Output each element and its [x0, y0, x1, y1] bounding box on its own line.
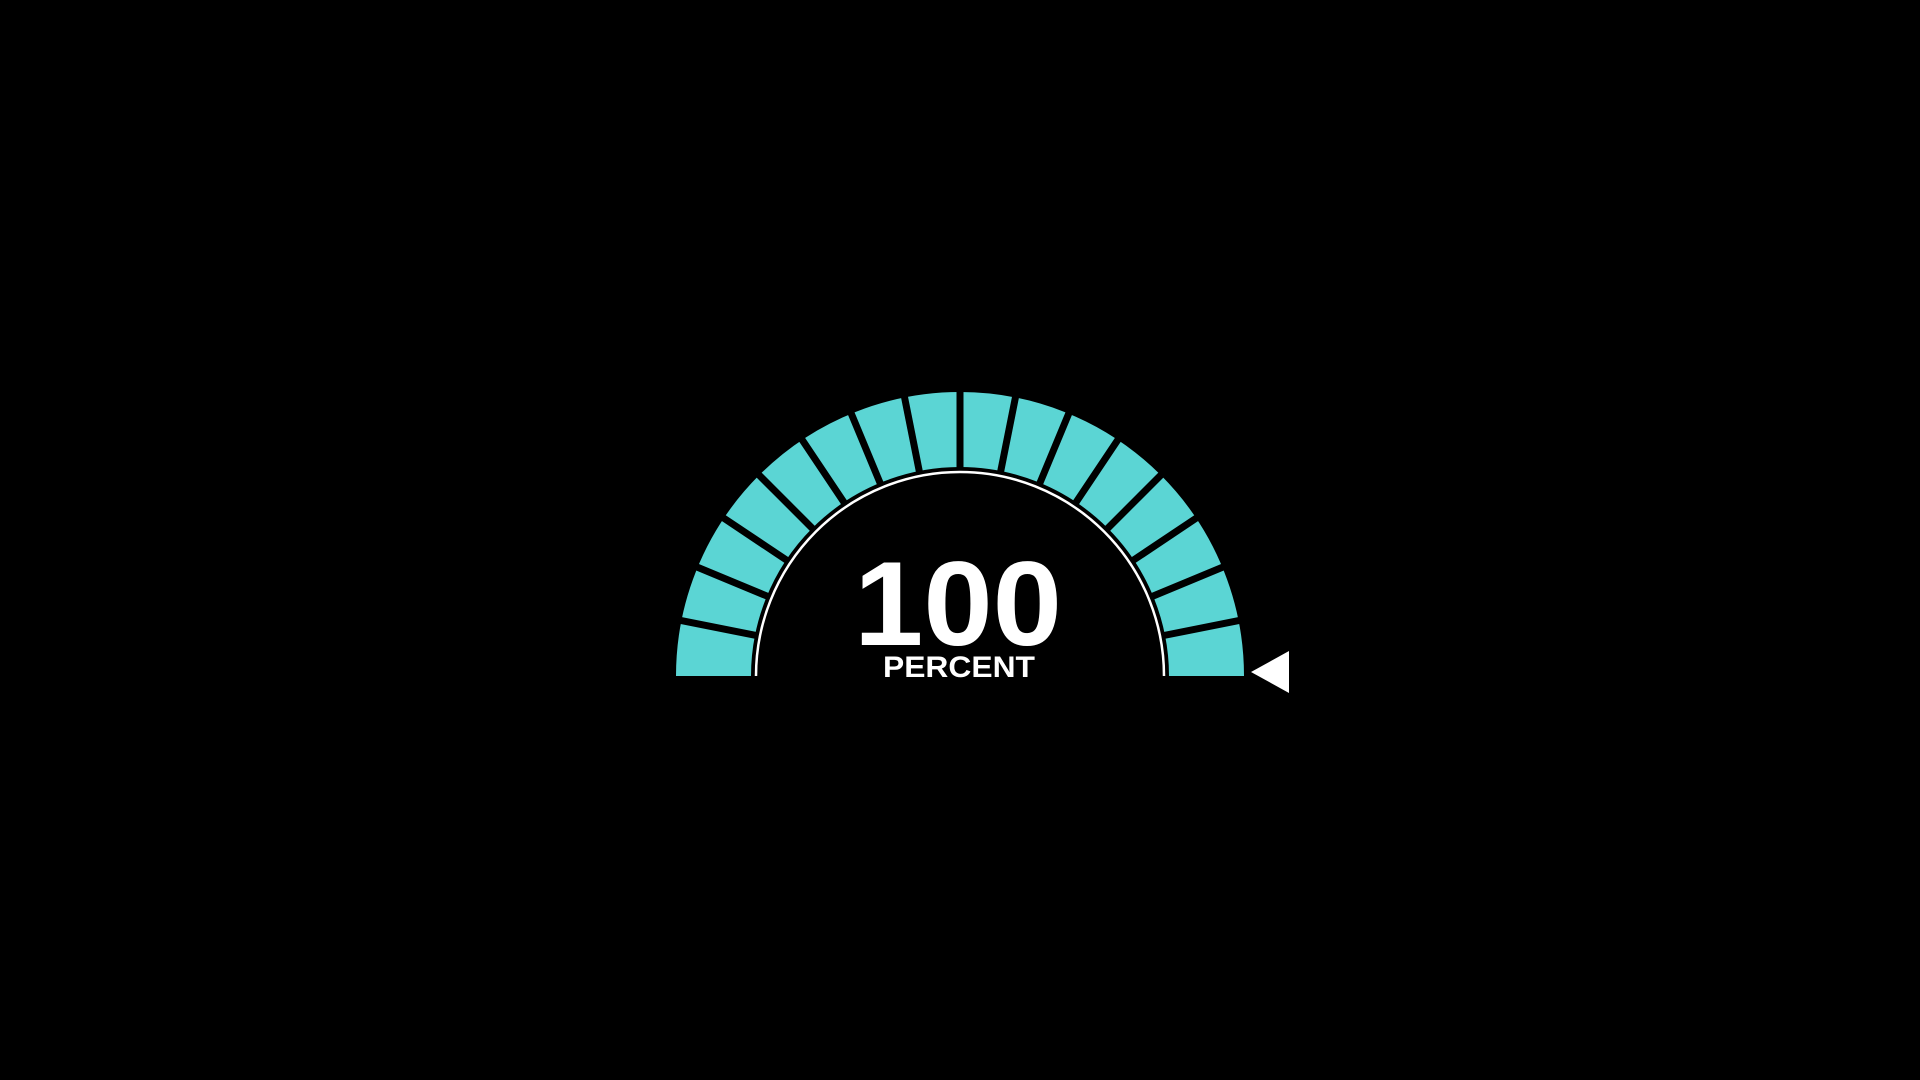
label: PERCENT: PERCENT: [883, 651, 1035, 684]
pointer triangle: [1251, 651, 1289, 693]
value: 100: 100: [854, 537, 1062, 671]
gauge: segmented arc: [676, 386, 1244, 676]
inner white arc: [756, 472, 1164, 676]
